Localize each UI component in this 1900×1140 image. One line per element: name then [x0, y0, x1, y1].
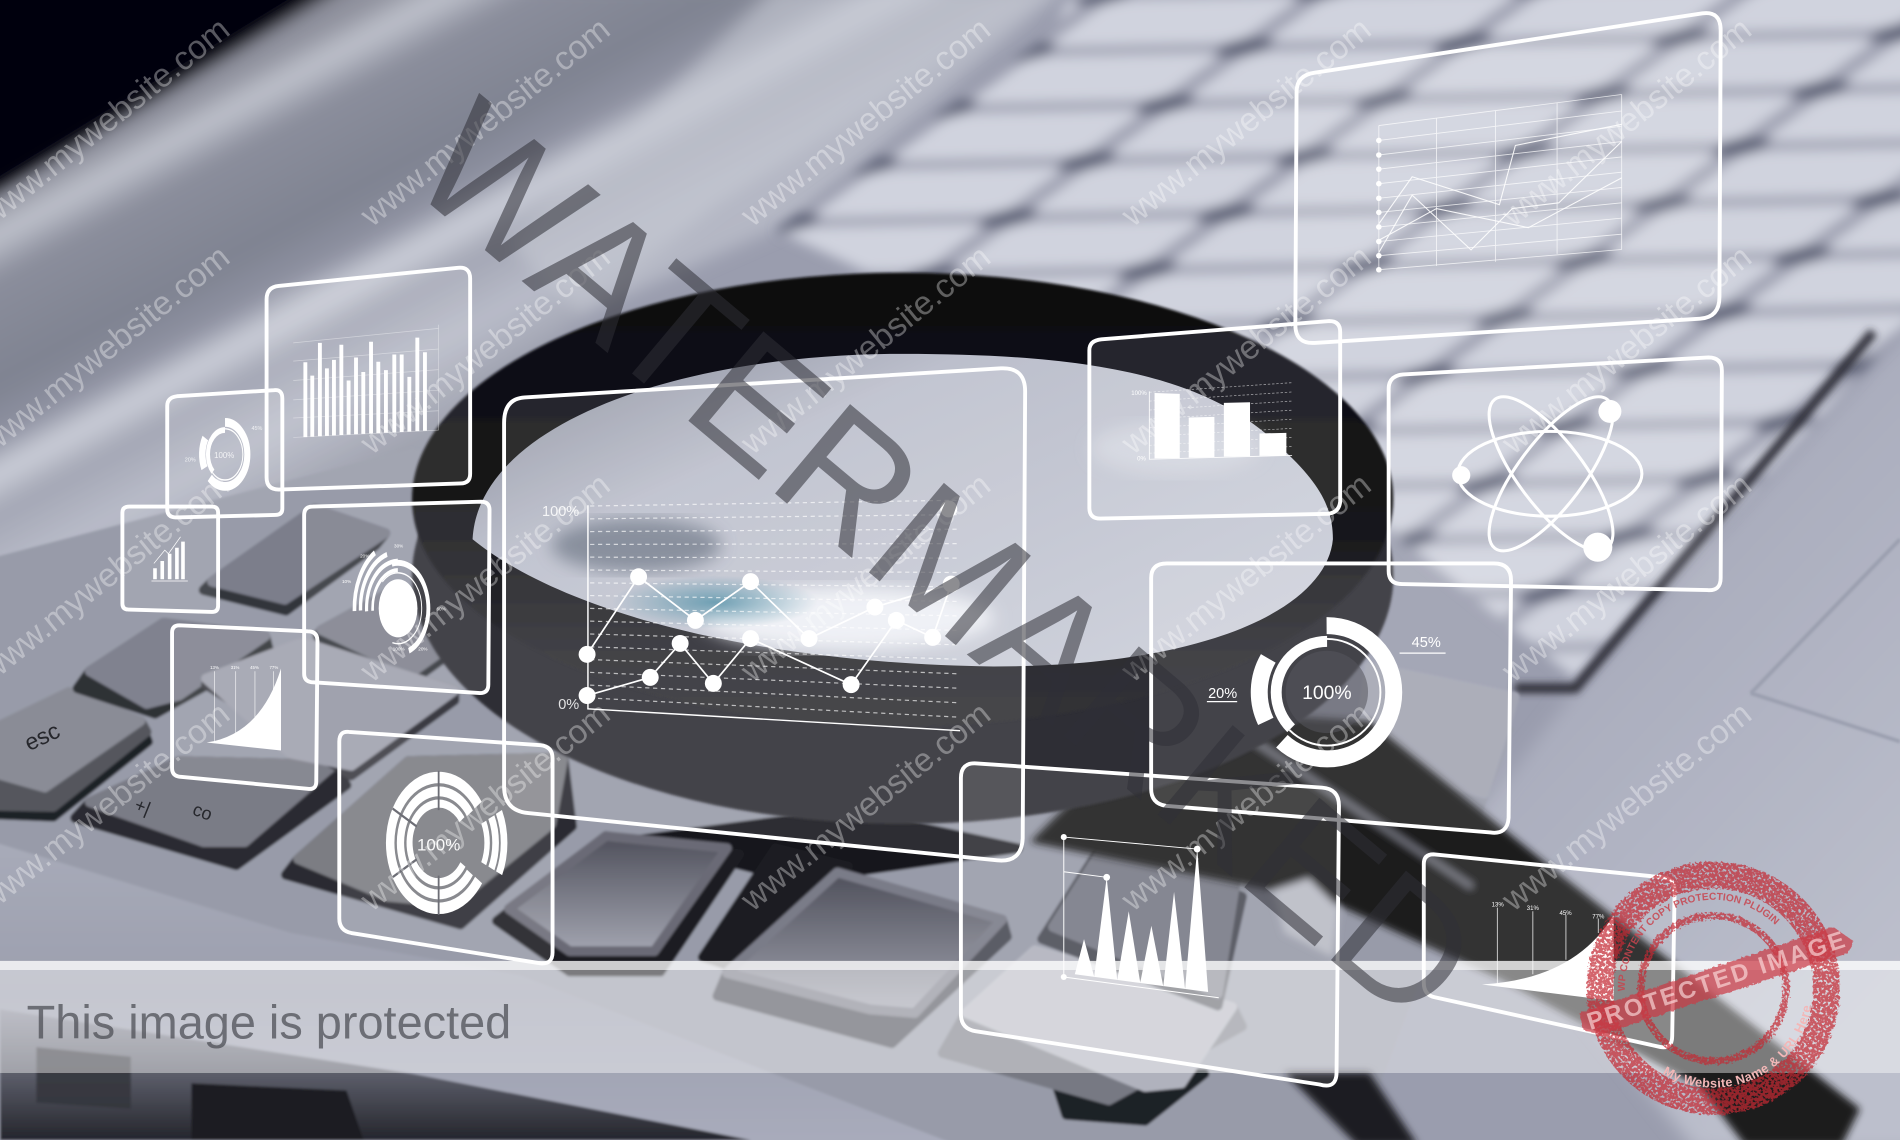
watermark: repeated website address: www.mywebsite.com [353, 11, 617, 235]
chart: peaks [1061, 834, 1219, 998]
watermark: repeated website address: www.mywebsite.com [1494, 466, 1759, 690]
icon: atom [1452, 380, 1642, 568]
panel: atom [1389, 357, 1722, 590]
panel: grid line chart top right [1295, 13, 1721, 343]
chart: small donut: 20% [185, 458, 196, 464]
stamp banner text: PROTECTED IMAGE [1584, 926, 1851, 1036]
panel: radial sunburst [304, 502, 490, 693]
watermark: repeated website address: www.mywebsite.com [1114, 11, 1378, 235]
watermark: repeated website address: www.mywebsite.com [733, 466, 998, 690]
chart: bars in left panel [293, 325, 439, 437]
chart: big donut [1207, 602, 1446, 782]
watermark: repeated website address [0, 11, 1759, 919]
watermark: repeated website address: www.mywebsite.com [1494, 695, 1759, 919]
chart: curve in right panel: 31% [1527, 906, 1540, 912]
chart: radial sunburst: 20% [418, 647, 427, 652]
chart: curve in left panel: 31% [231, 665, 240, 670]
chart: curve in right panel [1482, 902, 1614, 1001]
panel: big donut [1151, 563, 1511, 833]
key label: command: co [190, 799, 215, 825]
chart: curve in right panel: 77% [1592, 914, 1605, 920]
key label: plus minus: +| [132, 795, 153, 819]
chart: radial sunburst: 30% [394, 544, 403, 549]
chart: small rising bars [151, 537, 188, 581]
chart: curve in right panel: 13% [1492, 902, 1504, 908]
panel: small rising bars [122, 507, 218, 612]
chart: small donut [185, 411, 262, 498]
watermark: repeated website address: www.mywebsite.com [733, 695, 998, 919]
panel: target rings [339, 732, 553, 963]
foreground keyboard keys [0, 448, 1515, 1140]
stamp banner [1579, 927, 1854, 1035]
chart: radial sunburst: 10% [342, 579, 351, 584]
panel: bar chart left [267, 268, 470, 490]
watermark: WATERMARKED: WATERMARKED [380, 64, 1513, 1057]
panel: curve chart right [1424, 854, 1675, 1047]
stamp top text: WP CONTENT COPY PROTECTION PLUGIN [1618, 892, 1780, 991]
watermark: repeated website address: www.mywebsite.com [733, 239, 998, 462]
chart: big donut: 20% [1208, 686, 1237, 702]
watermark: repeated website address: www.mywebsite.com [353, 466, 617, 690]
watermark: repeated website address: www.mywebsite.com [1114, 695, 1378, 919]
chart: curve in right panel: 45% [1560, 911, 1572, 917]
watermark: repeated website address: www.mywebsite.com [1114, 466, 1378, 690]
panel: main line chart [504, 368, 1025, 861]
chart: radial sunburst: 60% [436, 607, 446, 612]
key label: esc: esc [20, 717, 64, 756]
panel: curve chart left [172, 625, 317, 789]
chart: center bar chart: 100% [1131, 391, 1147, 397]
chart: curve in left panel: 77% [269, 665, 278, 670]
chart: curve in left panel: 45% [250, 665, 259, 670]
band text: This image is protected [27, 996, 511, 1048]
chart: radial sunburst: 100% [393, 647, 405, 652]
watermark: repeated website address: www.mywebsite.com [353, 695, 617, 919]
chart: target rings: 100% [417, 836, 460, 855]
watermark: repeated website address: www.mywebsite.com [733, 11, 998, 235]
chart: curve in left panel: 13% [210, 665, 219, 670]
watermark: repeated website address: www.mywebsite.com [1494, 239, 1759, 462]
chart: center bar chart [1131, 383, 1292, 462]
panel: bar chart center [1089, 321, 1340, 519]
magnifying glass handle [1030, 709, 1860, 1140]
panel: peaks chart [961, 763, 1339, 1086]
stamp: protected image [1580, 860, 1854, 1116]
chart: radial sunburst [342, 541, 446, 676]
watermark: repeated website address: www.mywebsite.com [353, 239, 617, 462]
chart: radial sunburst: 20% [360, 553, 369, 558]
panel: small donut [167, 390, 282, 517]
chart: small donut: 100% [214, 451, 234, 460]
chart: big donut: 100% [1302, 682, 1352, 704]
watermark: repeated website address: www.mywebsite.com [1494, 11, 1759, 235]
chart: target rings [371, 747, 522, 939]
magnifying glass [412, 273, 1393, 824]
chart: main line chart: 100% [542, 504, 579, 520]
chart: big donut: 45% [1412, 635, 1441, 651]
protection band [0, 961, 1900, 1073]
chart: center bar chart: 0% [1137, 456, 1146, 462]
glass panel fills and outlines [122, 13, 1722, 1086]
chart: grid line chart [1376, 95, 1622, 273]
chart: small donut: 45% [251, 426, 262, 432]
stamp bottom text: My Website Name & URL Here [1663, 1006, 1811, 1088]
watermark: repeated website address: www.mywebsite.com [1114, 239, 1378, 462]
chart: curve in left panel [207, 665, 281, 751]
chart: main line chart [542, 500, 960, 731]
chart: main line chart: 0% [558, 697, 579, 713]
